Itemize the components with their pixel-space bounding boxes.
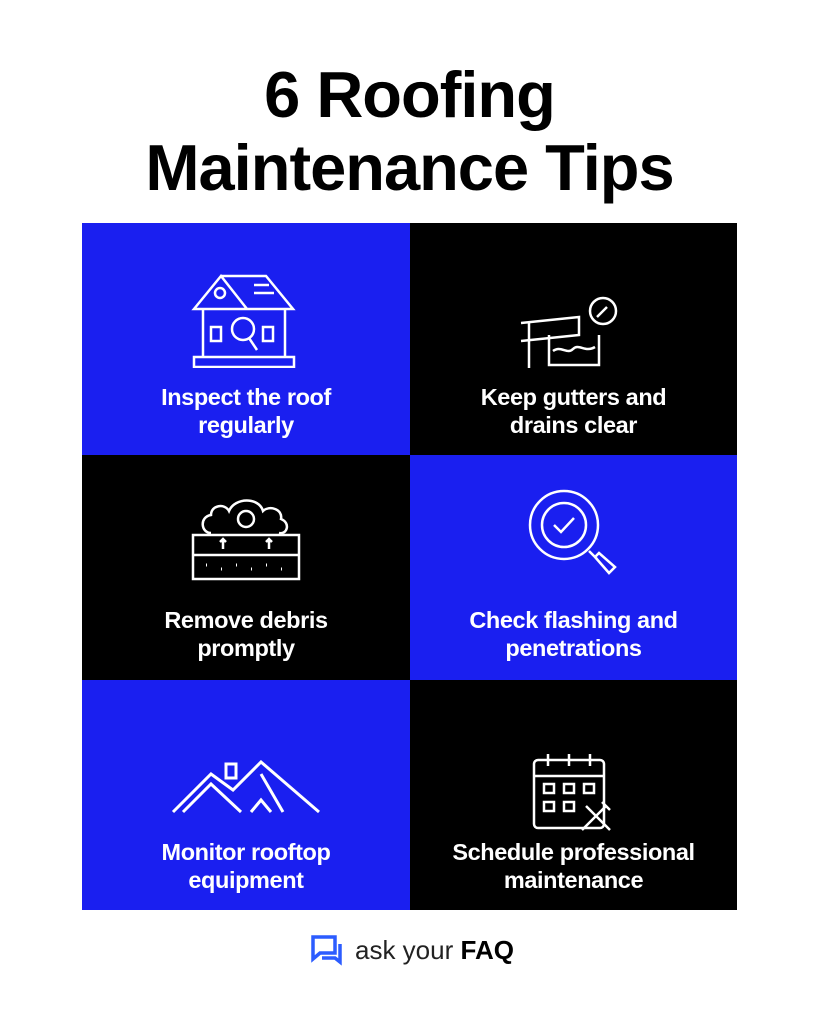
panel: gutters bbox=[410, 223, 737, 455]
text bbox=[162, 839, 330, 893]
text: drains clear bbox=[510, 412, 637, 438]
title: 6 Roofing bbox=[264, 58, 555, 131]
icon: calendar tools bbox=[532, 754, 611, 831]
text: regularly bbox=[198, 412, 294, 438]
text bbox=[164, 607, 328, 661]
icon: chat bubbles bbox=[311, 935, 342, 966]
text: equipment bbox=[188, 867, 304, 893]
text bbox=[469, 607, 678, 661]
panel: inspect bbox=[82, 223, 410, 455]
text: promptly bbox=[197, 635, 295, 661]
text: penetrations bbox=[505, 635, 642, 661]
text bbox=[481, 384, 666, 438]
text: Remove debris bbox=[164, 607, 328, 633]
icon: magnifier check bbox=[528, 490, 617, 575]
icon: gutter bbox=[520, 296, 618, 368]
panel: flashing bbox=[410, 455, 737, 680]
title bbox=[145, 58, 674, 204]
text bbox=[452, 839, 695, 893]
icon: house magnifier bbox=[191, 274, 296, 368]
title: Maintenance Tips bbox=[145, 131, 674, 204]
text: Monitor rooftop bbox=[162, 839, 330, 865]
panel: debris bbox=[82, 455, 410, 680]
logo text: ask your FAQ bbox=[355, 935, 514, 965]
text: maintenance bbox=[504, 867, 643, 893]
text: Keep gutters and bbox=[481, 384, 666, 410]
text: Inspect the roof bbox=[161, 384, 331, 410]
text: Schedule professional bbox=[452, 839, 695, 865]
text: Check flashing and bbox=[469, 607, 678, 633]
text bbox=[161, 384, 332, 438]
icon: rooftop bbox=[172, 760, 320, 814]
panel: schedule bbox=[410, 680, 737, 910]
panel: equipment bbox=[82, 680, 410, 910]
icon: debris bbox=[192, 499, 300, 580]
logo bbox=[311, 935, 514, 966]
